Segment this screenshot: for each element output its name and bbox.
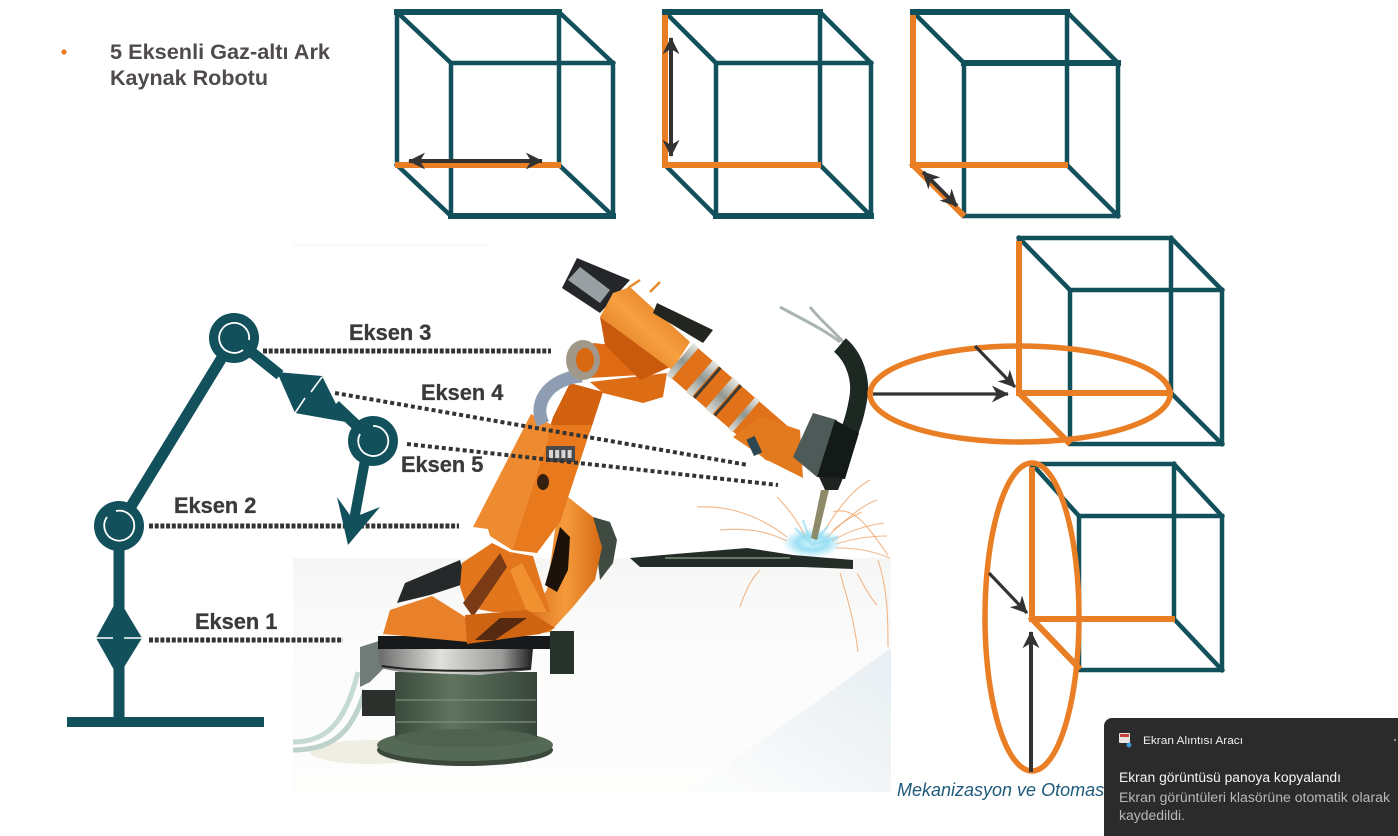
forearm banded (666, 343, 796, 464)
joint: Eksen 5 (348, 416, 398, 466)
arrow: rotation 4 diagonal (975, 346, 1015, 387)
footer text: Mekanizasyon ve Otomas (897, 780, 1104, 800)
joint: Eksen 2 (94, 501, 144, 551)
cube 2: y axis (665, 12, 871, 216)
ellipse: rotation 5 (985, 463, 1079, 771)
joint: Eksen 3 (209, 313, 259, 363)
arrow: rotation 5 diagonal (989, 573, 1027, 613)
lower arm and base housing (397, 560, 467, 603)
cube 5 with vertical ellipse (985, 463, 1222, 772)
photo: welding robot (293, 244, 891, 792)
heading: bullet and title: 5 Eksenli Gaz-altı Ark (110, 41, 330, 64)
notification toast: Ekran görüntüsü panoya kopyalandı (1119, 770, 1341, 785)
notification toast: Ekran görüntüleri klasörüne otomatik olarak (1119, 790, 1390, 805)
kinematic diagram (67, 313, 398, 727)
arrow: x movement (409, 159, 542, 163)
cube 4 with horizontal ellipse (870, 238, 1222, 444)
elbow (590, 373, 667, 403)
arrow: z movement (923, 172, 957, 206)
arrow: rotation 5 vertical (1029, 632, 1033, 772)
base (377, 734, 553, 766)
upper arm column (547, 383, 603, 436)
axis leader lines (149, 351, 778, 640)
torch and hose (780, 307, 845, 344)
upper housing (600, 317, 670, 380)
heading: bullet and title: Kaynak Robotu (110, 67, 268, 90)
arrow: y movement (669, 38, 673, 156)
axis labels: Eksen 3 (349, 320, 431, 345)
cube 3: z axis (913, 12, 1118, 216)
welding sparks (697, 480, 890, 652)
shoulder disc and hub (593, 517, 617, 580)
axis labels (174, 320, 503, 634)
axis labels: Eksen 4 (421, 380, 503, 405)
axis labels: Eksen 5 (401, 452, 483, 477)
blue-grey strap (540, 376, 582, 424)
workpiece (630, 548, 853, 569)
notification toast: kaydedildi. (1119, 808, 1185, 823)
icon: snipping tool (1119, 733, 1131, 747)
control plate (546, 446, 575, 462)
axis labels: Eksen 1 (195, 609, 277, 634)
rear motor (562, 258, 630, 313)
axis labels: Eksen 2 (174, 493, 256, 518)
cube 1: x axis (397, 12, 613, 216)
notification toast (1104, 718, 1398, 836)
arrow: rotation 4 horizontal (873, 392, 1008, 396)
heading: bullet and title (61, 41, 330, 90)
cables (293, 690, 365, 750)
notification toast: Ekran Alıntısı Aracı (1143, 735, 1243, 747)
ellipse: rotation 4 (870, 346, 1170, 442)
